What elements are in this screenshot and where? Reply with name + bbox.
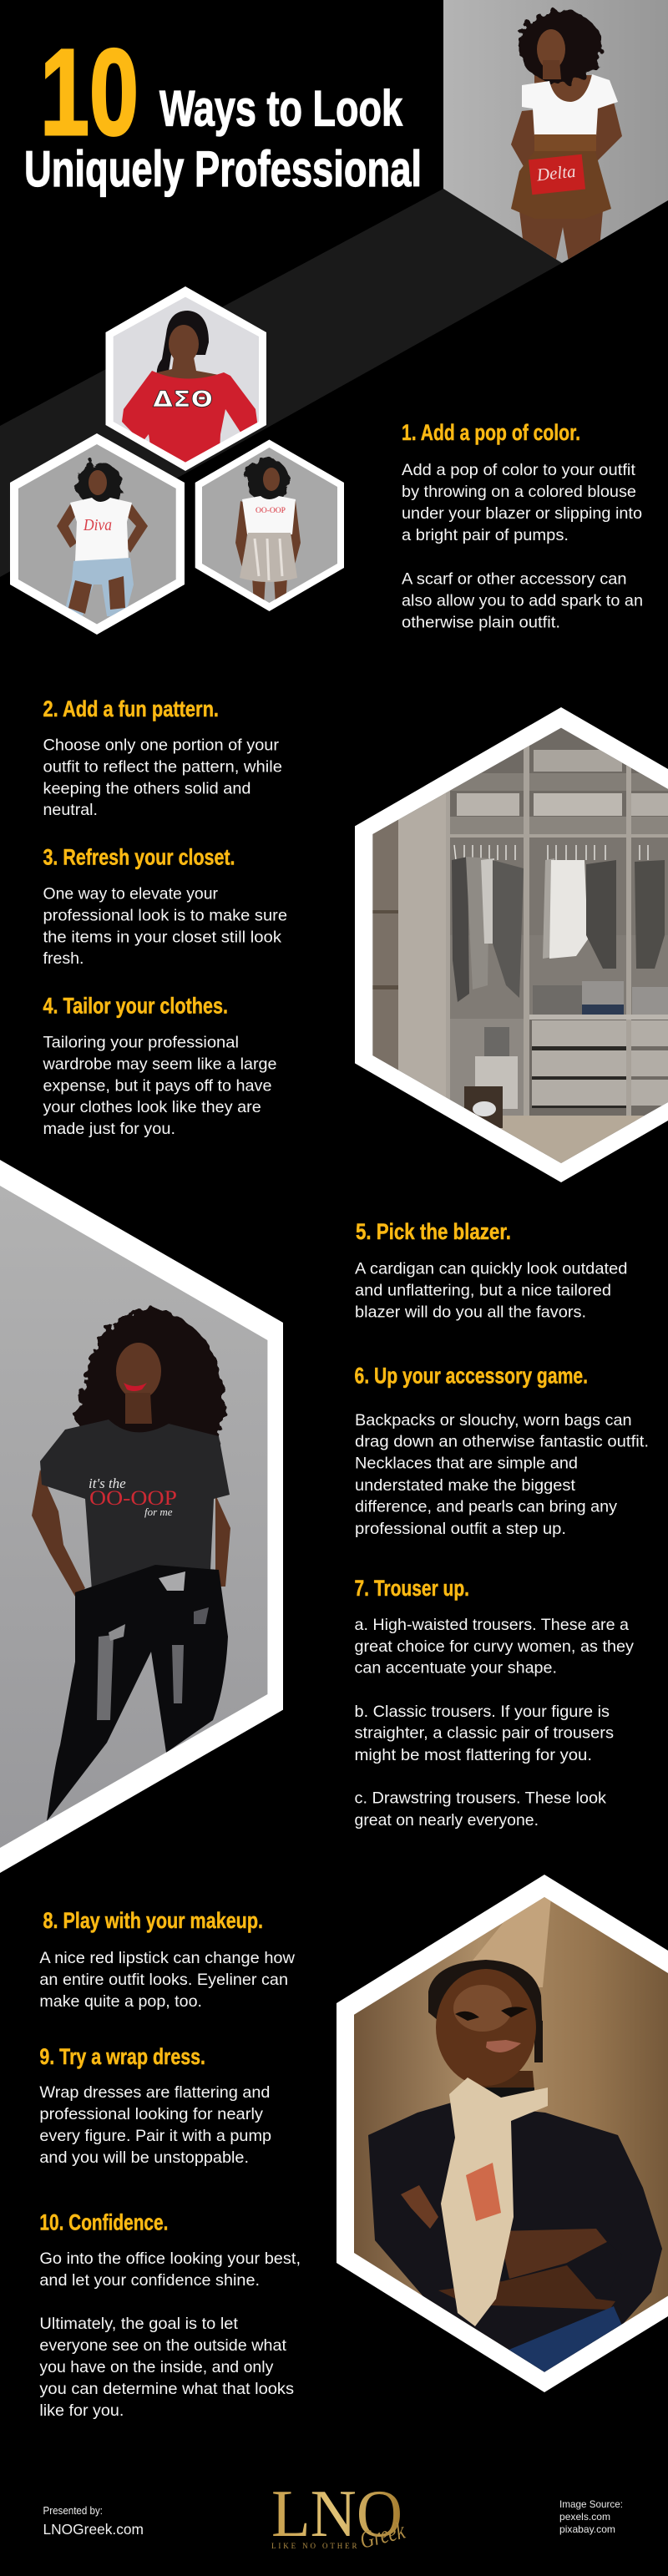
section 5: pick the blazer: blazer will do you all the favors.: [355, 1303, 586, 1321]
section 7: trouser up: [354, 1576, 634, 1830]
section 2: add a fun pattern: 2. Add a fun pattern.: [43, 696, 219, 721]
footer: image sources: pexels.com: [559, 2511, 610, 2523]
section 6: up your accessory game: understated make the biggest: [355, 1476, 576, 1495]
section 9: try a wrap dress: 9. Try a wrap dress.: [39, 2044, 205, 2069]
section 4: tailor your clothes: 4. Tailor your clothes.: [43, 994, 228, 1019]
section 8: play with your makeup: [39, 1908, 296, 2011]
section 1: add a pop of color: A scarf or other accessory can: [402, 569, 626, 588]
text: sweater letters: ΔΣΘ: [153, 387, 213, 412]
section 10: confidence: Go into the office looking your best,: [39, 2250, 301, 2268]
section 10: confidence: Ultimately, the goal is to let: [39, 2315, 239, 2333]
section 4: tailor your clothes: your clothes look like they are: [43, 1098, 261, 1116]
section 9: try a wrap dress: every figure. Pair it with a pump: [39, 2127, 271, 2145]
footer: presented by: LNOGreek.com: [43, 2521, 144, 2538]
section 5: pick the blazer: and unflattering, but a nice tailored: [355, 1282, 611, 1300]
panel: hexagon photo woman in red sweater: [105, 286, 266, 471]
section 1: add a pop of color: by throwing on a colored blouse: [402, 483, 636, 501]
section 4: tailor your clothes: [42, 994, 277, 1138]
footer: image sources: pixabay.com: [559, 2523, 615, 2535]
section 10: confidence: and let your confidence shine.: [39, 2271, 260, 2290]
section 7: trouser up: 7. Trouser up.: [354, 1576, 469, 1601]
section 8: play with your makeup: 8. Play with your makeup.: [43, 1908, 263, 1933]
text: tee lettering: OO-OOP: [256, 506, 286, 514]
section 4: tailor your clothes: expense, but it pays off to have: [43, 1076, 272, 1095]
footer: LNO Greek logo: LNO: [271, 2477, 402, 2551]
section 3: refresh your closet: [43, 844, 287, 968]
section 3: refresh your closet: fresh.: [43, 949, 84, 968]
panel: hexagon portrait of woman with scarf: [337, 1875, 668, 2392]
section 4: tailor your clothes: made just for you.: [43, 1120, 175, 1138]
section 8: play with your makeup: make quite a pop, too.: [39, 1992, 202, 2011]
text: tee lettering: Diva: [83, 516, 112, 534]
footer: image sources: Image Source:: [559, 2498, 623, 2510]
section 10: confidence: you have on the inside, and only: [39, 2358, 274, 2376]
footer: image sources: [559, 2498, 623, 2535]
section 4: tailor your clothes: wardrobe may seem like a large: [42, 1055, 277, 1073]
section 10: confidence: you can determine what that looks: [39, 2380, 294, 2398]
title: Uniquely Professional: [24, 141, 422, 197]
section 5: pick the blazer: 5. Pick the blazer.: [356, 1219, 511, 1244]
text: shirt script top: it's the: [89, 1475, 126, 1491]
section 10: confidence: everyone see on the outside what: [39, 2336, 287, 2355]
section 7: trouser up: might be most flattering for you.: [354, 1746, 592, 1764]
section 9: try a wrap dress: and you will be unstoppable.: [39, 2148, 249, 2167]
section 8: play with your makeup: an entire outfit looks. Eyeliner can: [39, 1971, 288, 1989]
section 6: up your accessory game: [354, 1363, 649, 1538]
section 6: up your accessory game: difference, and pearls can bring any: [355, 1498, 617, 1516]
section 6: up your accessory game: drag down an otherwise fantastic outfit.: [355, 1433, 649, 1451]
section 9: try a wrap dress: Wrap dresses are flattering and: [39, 2083, 270, 2102]
section 2: add a fun pattern: keeping the others solid and: [43, 779, 250, 797]
title: [24, 24, 422, 197]
section 1: add a pop of color: Add a pop of color to your outfit: [402, 461, 636, 479]
text: shirt lettering: OO-OOP: [89, 1487, 177, 1510]
diagonal dark band: [0, 189, 562, 577]
section 4: tailor your clothes: Tailoring your professional: [43, 1033, 239, 1051]
section 7: trouser up: great choice for curvy women, as they: [354, 1637, 634, 1656]
section 6: up your accessory game: Backpacks or slouchy, worn bags can: [355, 1411, 632, 1430]
section 1: add a pop of color: otherwise plain outfit.: [402, 613, 560, 631]
section 5: pick the blazer: [355, 1219, 628, 1321]
section 3: refresh your closet: the items in your closet still look: [43, 928, 281, 946]
footer: LNO Greek logo: Greek: [357, 2517, 408, 2554]
section 3: refresh your closet: professional look is to make sure: [43, 906, 287, 924]
section 3: refresh your closet: 3. Refresh your closet.: [43, 844, 235, 869]
section 2: add a fun pattern: neutral.: [43, 801, 98, 819]
section 3: refresh your closet: One way to elevate your: [43, 884, 218, 903]
section 1: add a pop of color: also allow you to add spark to an: [402, 591, 643, 610]
text: shirt script bottom: for me: [144, 1506, 173, 1518]
section 2: add a fun pattern: Choose only one portion of your: [43, 736, 280, 754]
panel: top-right photo of woman with red clutch: [443, 0, 668, 267]
title: 10: [40, 24, 139, 161]
title: Ways to Look: [159, 80, 402, 137]
section 7: trouser up: a. High-waisted trousers. These are a: [354, 1616, 629, 1634]
section 7: trouser up: c. Drawstring trousers. These look: [354, 1789, 606, 1807]
section 7: trouser up: straighter, a classic pair of trousers: [354, 1724, 614, 1743]
section 10: confidence: 10. Confidence.: [39, 2210, 168, 2235]
section 6: up your accessory game: professional outfit a step up.: [355, 1520, 566, 1538]
panel: hexagon photo woman in sequin skirt: [195, 439, 344, 611]
section 7: trouser up: can accentuate your shape.: [354, 1659, 557, 1678]
section 9: try a wrap dress: professional looking for nearly: [39, 2105, 263, 2123]
section 2: add a fun pattern: [43, 696, 282, 819]
section 9: try a wrap dress: [39, 2044, 271, 2167]
section 1: add a pop of color: [402, 420, 643, 631]
footer: presented by: Presented by:: [43, 2505, 103, 2517]
section 10: confidence: [39, 2210, 301, 2420]
section 6: up your accessory game: 6. Up your accessory game.: [354, 1363, 588, 1388]
section 8: play with your makeup: A nice red lipstick can change how: [39, 1949, 296, 1967]
footer: presented by: [43, 2505, 144, 2538]
section 1: add a pop of color: under your blazer or slipping into: [402, 504, 642, 523]
section 1: add a pop of color: 1. Add a pop of color.: [402, 420, 580, 445]
panel: hexagon photo woman in white tee and ripped jeans: [10, 433, 185, 635]
section 7: trouser up: b. Classic trousers. If your figure is: [354, 1703, 610, 1721]
text: clutch lettering: Delta: [535, 161, 577, 185]
panel: hexagon photo of closet: [355, 707, 668, 1182]
section 5: pick the blazer: A cardigan can quickly look outdated: [355, 1259, 628, 1278]
section 7: trouser up: great on nearly everyone.: [354, 1811, 539, 1830]
footer: LNO Greek logo: LIKE NO OTHER: [271, 2542, 357, 2550]
section 1: add a pop of color: a bright pair of pumps.: [402, 526, 569, 544]
section 6: up your accessory game: Necklaces that are simple and: [355, 1455, 578, 1473]
section 10: confidence: like for you.: [39, 2401, 124, 2420]
panel: large photo of woman in black sequin trousers: [0, 1160, 283, 1873]
section 2: add a fun pattern: outfit to reflect the pattern, while: [43, 757, 282, 776]
